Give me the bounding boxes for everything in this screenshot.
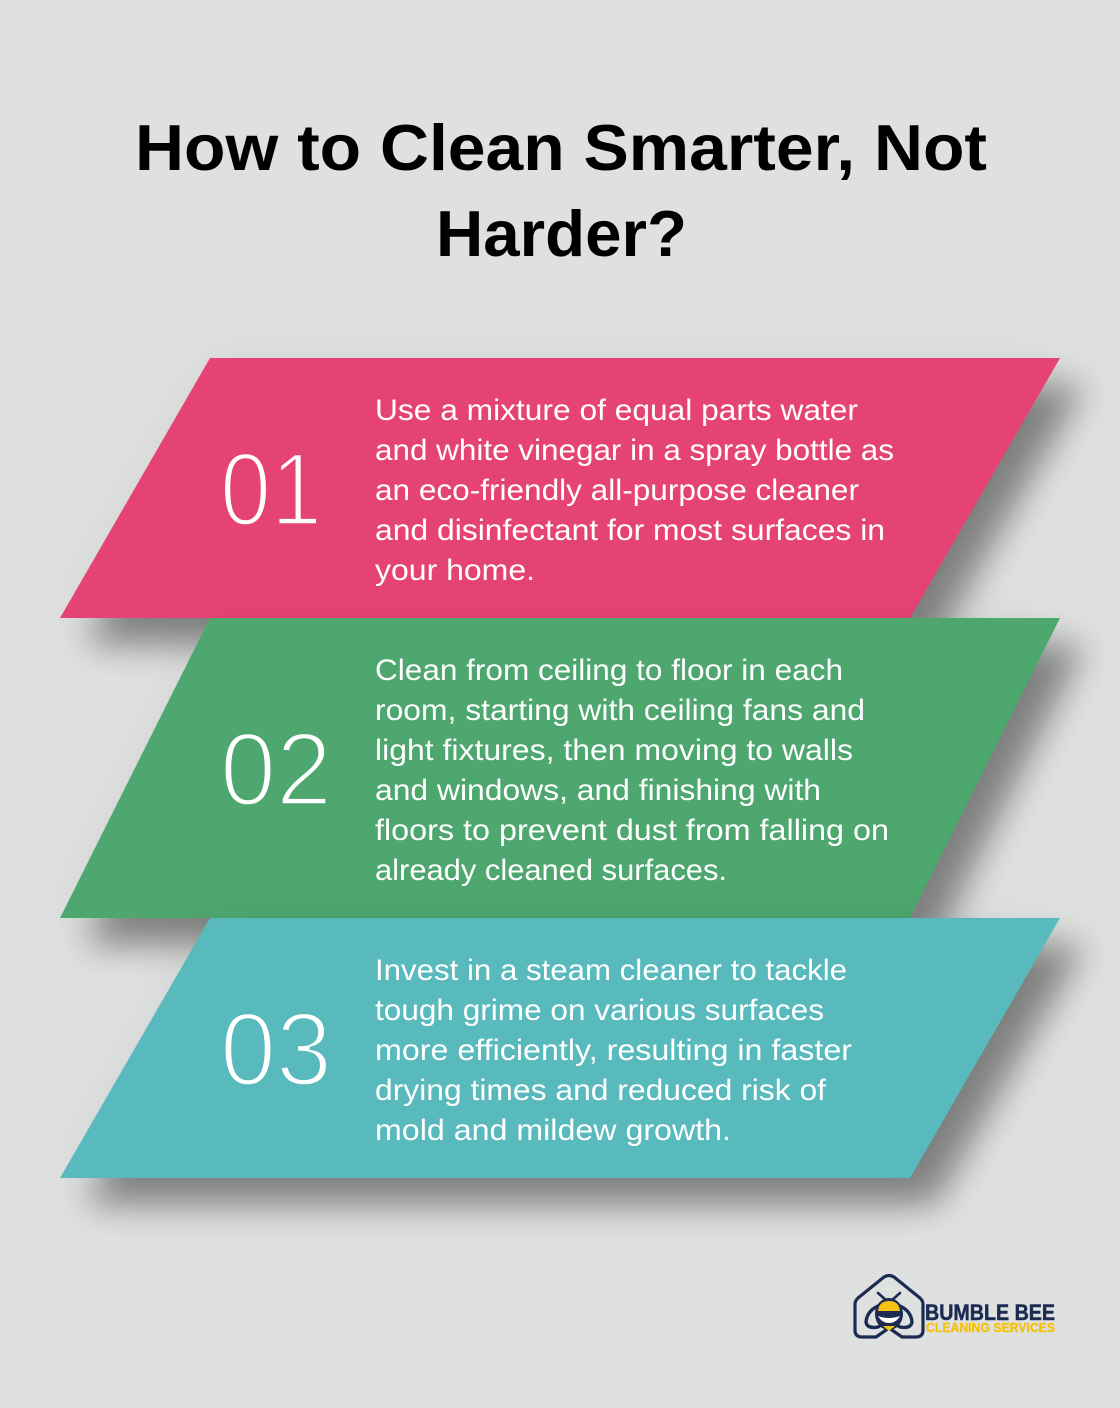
- panel: step 02: [60, 618, 1060, 918]
- text: step 01: your home.: [375, 554, 535, 587]
- text: step 02: floors to prevent dust from falling on: [375, 814, 889, 847]
- number 03: 03: [220, 992, 332, 1108]
- logo: Bumble Bee Cleaning Services: [855, 1276, 1055, 1337]
- pink parallelogram: [60, 358, 1060, 618]
- text: step 01: Use a mixture of equal parts water: [375, 394, 858, 427]
- number 02: 02: [220, 712, 332, 828]
- text: step 01: and disinfectant for most surfaces in: [375, 514, 885, 547]
- title: How to Clean Smarter, Not: [135, 111, 987, 184]
- brand tagline: CLEANING SERVICES: [926, 1321, 1055, 1335]
- green parallelogram: [60, 618, 1060, 918]
- brand name: BUMBLE BEE: [925, 1300, 1055, 1325]
- text: step 01: [375, 394, 894, 587]
- title: Harder?: [436, 197, 687, 270]
- text: step 02: room, starting with ceiling fans and: [375, 694, 865, 727]
- text: step 03: Invest in a steam cleaner to tackle: [375, 954, 847, 987]
- text: step 02: [375, 654, 889, 887]
- panel: step 03: [60, 918, 1060, 1178]
- teal parallelogram: [60, 918, 1060, 1178]
- text: step 02: already cleaned surfaces.: [375, 854, 727, 887]
- text: step 03: more efficiently, resulting in faster: [375, 1034, 852, 1067]
- text: step 03: mold and mildew growth.: [375, 1114, 731, 1147]
- text: step 01: an eco-friendly all-purpose cleaner: [375, 474, 859, 507]
- text: step 01: and white vinegar in a spray bottle as: [375, 434, 894, 467]
- text: step 02: Clean from ceiling to floor in each: [375, 654, 843, 687]
- text: step 03: tough grime on various surfaces: [375, 994, 824, 1027]
- panel: step 01: [60, 358, 1060, 618]
- number 01: 01: [220, 432, 322, 548]
- text: step 03: drying times and reduced risk of: [375, 1074, 827, 1107]
- text: step 02: light fixtures, then moving to walls: [375, 734, 853, 767]
- title: [135, 111, 987, 270]
- text: step 02: and windows, and finishing with: [375, 774, 821, 807]
- icon: house with bee: [855, 1276, 923, 1337]
- text: step 03: [375, 954, 852, 1147]
